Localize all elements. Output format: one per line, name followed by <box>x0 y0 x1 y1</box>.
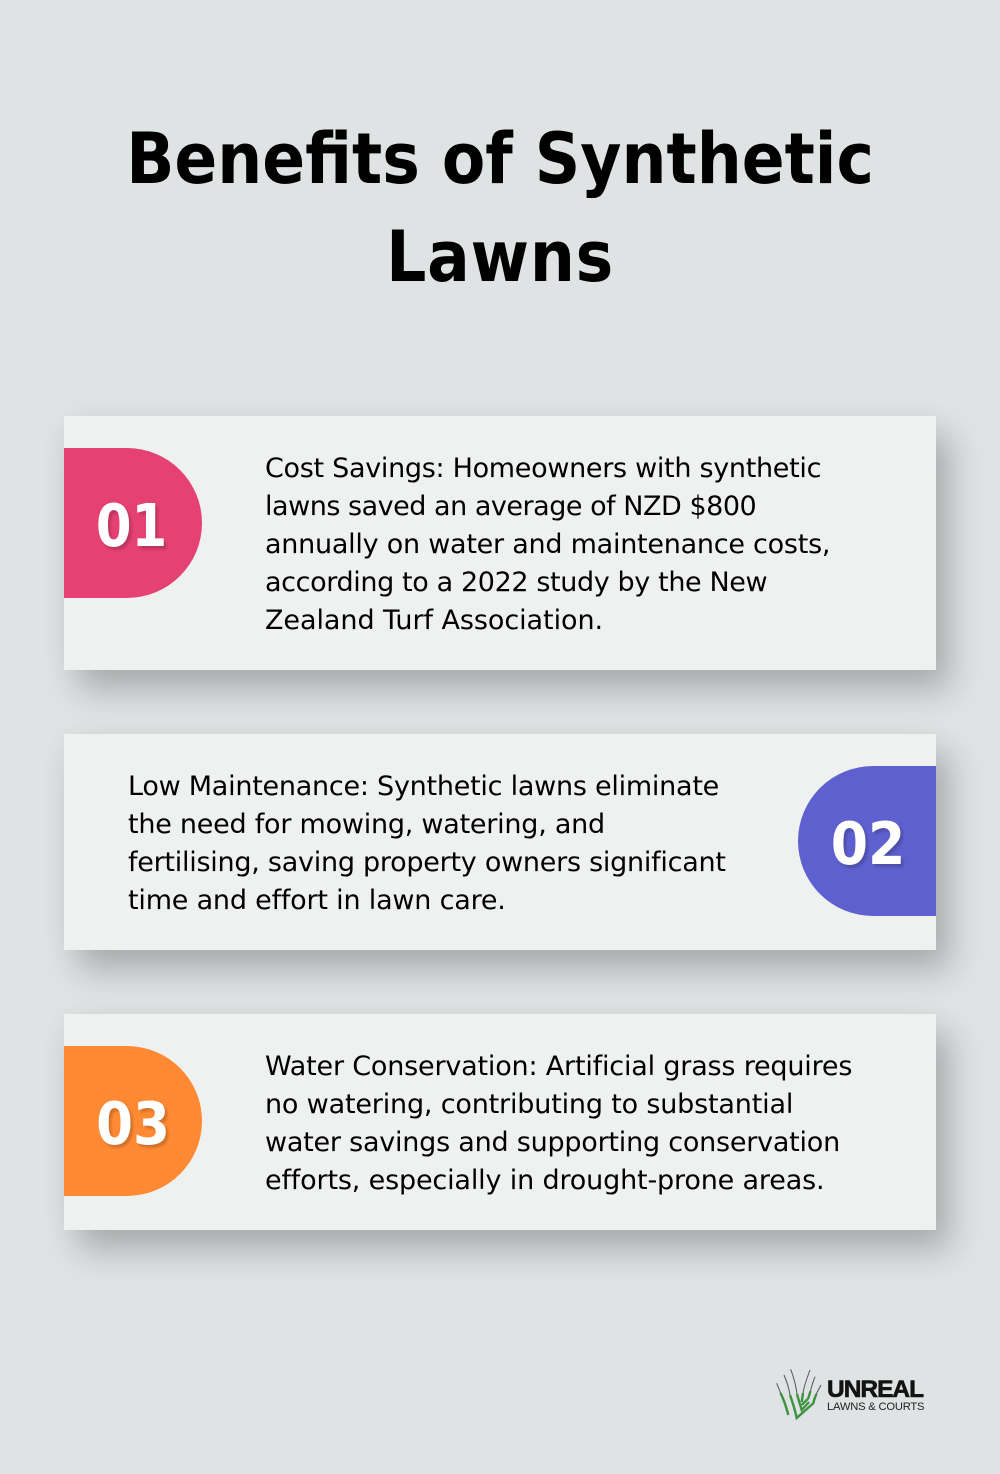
logo wordmark: UNREAL <box>827 1376 923 1403</box>
badge: 02: 02 <box>831 808 905 878</box>
text: low maintenance: fertilising, saving property owners significant <box>128 847 726 878</box>
text: cost savings: annually on water and maintenance costs, <box>265 529 830 560</box>
badge: 03: 03 <box>96 1088 170 1158</box>
panel: low maintenance <box>64 734 936 950</box>
panel: water conservation <box>64 1014 936 1230</box>
title: Lawns <box>386 216 614 298</box>
icon: grass <box>776 1369 822 1420</box>
panel: cost savings <box>64 416 936 670</box>
badge: 01: 01 <box>96 490 167 560</box>
text: cost savings: lawns saved an average of NZD $800 <box>265 491 756 522</box>
text: water conservation: Water Conservation: Artificial grass requires <box>265 1051 852 1082</box>
text: low maintenance: time and effort in lawn care. <box>128 885 506 916</box>
text: low maintenance: the need for mowing, watering, and <box>128 809 605 840</box>
text: low maintenance <box>128 771 726 916</box>
badge: 01 <box>64 448 202 598</box>
badge: 02 <box>798 766 936 916</box>
logo <box>776 1369 924 1420</box>
text: cost savings: Cost Savings: Homeowners with synthetic <box>265 453 821 484</box>
text: water conservation: efforts, especially in drought-prone areas. <box>265 1165 824 1196</box>
logo tagline: LAWNS & COURTS <box>827 1401 924 1413</box>
text: water conservation: water savings and supporting conservation <box>265 1127 840 1158</box>
text: water conservation: no watering, contributing to substantial <box>265 1089 793 1120</box>
title <box>126 118 874 298</box>
text: cost savings: Zealand Turf Association. <box>265 605 603 636</box>
text: cost savings: according to a 2022 study by the New <box>265 567 767 598</box>
title: Benefits of Synthetic <box>126 118 874 200</box>
text: cost savings <box>265 453 830 636</box>
text: low maintenance: Low Maintenance: Synthetic lawns eliminate <box>128 771 719 802</box>
text: water conservation <box>265 1051 852 1196</box>
badge: 03 <box>64 1046 202 1196</box>
